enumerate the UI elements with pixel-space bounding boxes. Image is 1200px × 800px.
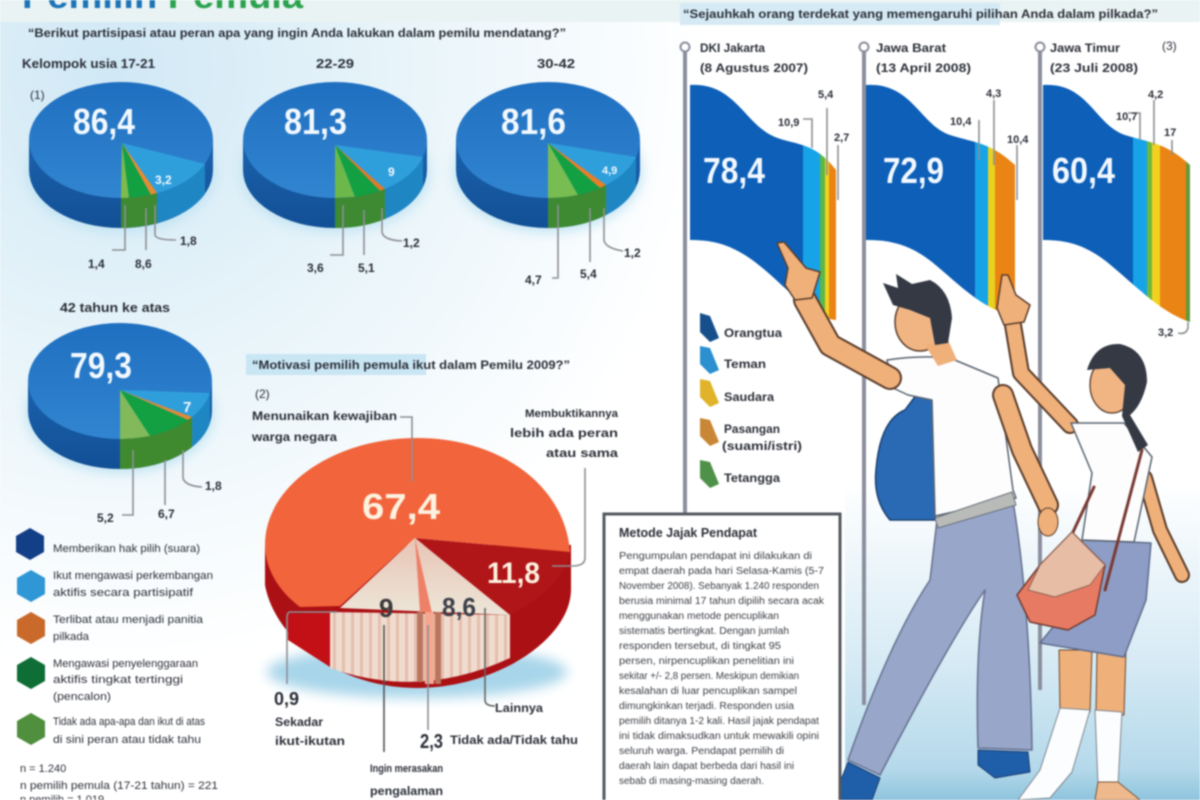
boy belt <box>935 492 1016 528</box>
callout: do not know <box>420 625 578 753</box>
pie chart: 42 and above: 7 <box>183 399 191 416</box>
legend item: no role: Tidak ada apa-apa dan ikut di atas <box>53 716 205 728</box>
pie chart: 17-21: 1,4 <box>88 257 105 271</box>
callout: experience: pengalaman <box>370 784 443 798</box>
flag chart: Jawa Timur: 10,7 <box>1116 111 1137 123</box>
pie chart: 30-42: 4,9 <box>602 165 617 177</box>
box body text: pemilih ditanya 1-2 kali. Hasil jajak pendapat <box>619 716 819 727</box>
box body text: berusia minimal 17 tahun dipilih secara acak <box>619 596 825 607</box>
callout: experience: Ingin merasakan <box>370 763 443 775</box>
callout: just following along: 0,9 <box>274 689 299 709</box>
pie chart: 42 and above: 79,3 <box>70 345 132 386</box>
boy lower arm <box>1003 395 1058 536</box>
callout: proving participation: atau sama <box>546 446 618 460</box>
callout: just following along: Sekadar <box>275 715 323 729</box>
box body text: sekitar +/- 2,8 persen. Meskipun demikian <box>619 671 799 682</box>
pie chart: 30-42: 4,7 <box>525 273 542 287</box>
heading highlight and question: “Sejauhkah orang terdekat yang memengaruhi pilihan Anda dalam pilkada?” <box>683 7 1158 21</box>
legend item: parents <box>700 313 782 342</box>
flag chart: Jawa Timur: 60,4 <box>1052 150 1115 191</box>
flag chart: Jawa Barat: 10,4 <box>1007 134 1029 146</box>
flag chart: DKI Jakarta: 78,4 <box>703 150 765 191</box>
callout: proving participation: Membuktikannya <box>525 408 619 420</box>
flag chart: Jawa Barat: (13 April 2008) <box>876 61 971 75</box>
callout: civic duty: warga negara <box>251 430 337 444</box>
flag chart: Jawa Timur: 4,2 <box>1148 89 1163 101</box>
pie chart: 30-42: 5,4 <box>580 267 597 281</box>
pie chart: 22-29 <box>241 82 429 275</box>
legend item: voting: Memberikan hak pilih (suara) <box>53 543 200 555</box>
flag chart: DKI Jakarta <box>688 41 849 325</box>
boy shoes <box>833 750 1030 800</box>
legend item: parents: Orangtua <box>724 326 782 340</box>
heading highlight and question <box>246 354 570 375</box>
3D pie chart: motivation: 9 <box>379 593 393 623</box>
legend item: neighbours <box>700 460 780 488</box>
boy backpack <box>876 363 941 520</box>
panel: influencers in regional elections <box>680 3 1191 705</box>
3D pie chart: motivation <box>265 438 571 698</box>
legend item: committee <box>17 612 204 644</box>
callout: other <box>485 608 543 715</box>
legend item: relatives <box>700 379 774 407</box>
box body text: dimungkinkan terjadi. Responden usia <box>619 701 794 712</box>
flag chart: Jawa Timur: 3,2 <box>1158 327 1173 339</box>
callout: experience <box>370 625 443 798</box>
3D pie chart: motivation: 11,8 <box>487 557 540 590</box>
pie chart: 22-29: 1,2 <box>403 236 420 250</box>
box body text: responden tersebut, di tingkat 95 <box>619 641 781 652</box>
flag chart: Jawa Barat: Jawa Barat <box>876 41 946 55</box>
girl hair <box>1087 344 1148 452</box>
legend item: spouse <box>700 418 802 453</box>
panel: age group pie charts <box>22 56 642 525</box>
legend item: monitoring: aktifis secara partisipatif <box>53 587 194 599</box>
legend item: friends <box>700 346 766 374</box>
box heading: Metode Jajak Pendapat <box>619 526 758 540</box>
box body text: November 2008). Sebanyak 1.240 responden <box>619 581 819 592</box>
pie chart: 17-21: 8,6 <box>135 257 152 271</box>
label: age 22-29: 22-29 <box>316 56 354 71</box>
label: age 42 and above: 42 tahun ke atas <box>60 300 170 315</box>
pie chart: 17-21: 86,4 <box>73 101 135 142</box>
legend item: committee: Terlibat atau menjadi panitia <box>53 614 204 626</box>
pie chart: 30-42: 81,6 <box>501 101 566 142</box>
boy raised arm outline and skin <box>777 242 890 378</box>
label: chart number: (3) <box>1162 39 1177 53</box>
girl lower arm <box>1145 478 1182 575</box>
girl head <box>1090 357 1134 413</box>
label: chart number: (2) <box>255 387 270 401</box>
panel: survey methodology box <box>604 514 840 800</box>
pie chart: 22-29: 3,6 <box>307 261 324 275</box>
flag chart: Jawa Barat: 10,4 <box>950 116 972 128</box>
legend item: high-level involvement: (pencalon) <box>53 691 111 703</box>
box body text: seluruh warga. Pendapat pemilih di <box>619 746 784 757</box>
illustration: girl student pointing <box>997 275 1182 800</box>
legend item: voting <box>16 528 200 560</box>
legend item: high-level involvement: aktifis tingkat tertinggi <box>53 674 183 686</box>
girl legs <box>1059 650 1126 715</box>
flag chart: DKI Jakarta: 2,7 <box>834 132 849 144</box>
subtitle: survey question one: “Berikut partisipasi atau peran apa yang ingin Anda lakukan dalam pemilu mendatang?” <box>28 26 566 40</box>
flag chart: Jawa Barat: 4,3 <box>986 88 1001 100</box>
pie chart: 30-42 <box>454 82 642 287</box>
legend: participation types <box>16 528 218 800</box>
boy trousers <box>848 495 1032 775</box>
flag chart: Jawa Timur <box>1043 41 1191 339</box>
flag chart: DKI Jakarta: (8 Agustus 2007) <box>700 61 808 75</box>
box body text: sebab di masing-masing daerah. <box>619 776 764 787</box>
girl shoulder bag <box>1017 532 1105 630</box>
legend item: spouse: (suami/istri) <box>722 439 802 453</box>
bag strap <box>1060 450 1142 590</box>
boy hair <box>883 274 952 345</box>
legend item: friends: Teman <box>724 357 766 371</box>
legend item: no role <box>17 713 205 746</box>
legend item: monitoring: Ikut mengawasi perkembangan <box>53 570 213 582</box>
pie chart: 42 and above <box>26 323 222 525</box>
legend item: committee: pilkada <box>53 631 90 643</box>
flag chart: Jawa Timur: Jawa Timur <box>1050 41 1120 55</box>
pie chart: 30-42: 1,2 <box>624 246 641 260</box>
pie chart: 17-21: 3,2 <box>155 173 172 187</box>
flag chart: DKI Jakarta: 10,9 <box>778 117 799 129</box>
callout: proving participation <box>510 408 619 566</box>
pie chart: 42 and above: 6,7 <box>158 507 175 521</box>
panel: first-time voter motivation <box>246 354 619 798</box>
callout: proving participation: lebih ada peran <box>510 426 618 440</box>
label: age 30-42: 30-42 <box>537 56 575 71</box>
girl feet <box>1095 782 1140 800</box>
legend: influencer types <box>700 313 802 488</box>
label: age 17-21: Kelompok usia 17-21 <box>22 56 155 71</box>
legend item: high-level involvement <box>17 657 198 703</box>
callout: civic duty: Menunaikan kewajiban <box>252 409 397 423</box>
legend item: relatives: Saudara <box>724 390 774 404</box>
girl skirt <box>1040 540 1151 657</box>
boy neck <box>925 340 957 366</box>
callout: do not know: 2,3 <box>420 731 443 753</box>
box body text: daerah lain dapat berbeda dari hasil ini <box>619 761 794 772</box>
girl raised arm <box>997 275 1070 425</box>
legend item: neighbours: Tetangga <box>724 471 780 485</box>
3D pie chart: motivation: 67,4 <box>362 486 440 527</box>
box body text: menggunakan metode pencuplikan <box>619 611 779 622</box>
heading highlight and question <box>680 3 1158 25</box>
boy head <box>895 293 945 351</box>
legend item: monitoring <box>17 570 213 602</box>
girl socks <box>1018 708 1122 800</box>
callout: civic duty <box>251 409 412 482</box>
box body text: Pengumpulan pendapat ini dilakukan di <box>619 551 812 562</box>
callout: other: Lainnya <box>495 701 543 715</box>
heading highlight and question: “Motivasi pemilih pemula ikut dalam Pemilu 2009?” <box>252 358 570 372</box>
pie chart: 22-29: 9 <box>388 165 395 179</box>
flag chart: DKI Jakarta: 5,4 <box>818 89 834 101</box>
pie chart: 17-21: 1,8 <box>180 234 197 248</box>
sample note: n = 1.240 <box>20 763 66 775</box>
box body text: persen, nirpencuplikan penelitian ini <box>619 656 794 667</box>
pie chart: 42 and above: 1,8 <box>205 479 222 493</box>
box body text: sistematis bertingkat. Dengan jumlah <box>619 626 789 637</box>
box body text: empat daerah pada hari Selasa-Kamis (5-7 <box>619 566 824 577</box>
callout: just following along <box>274 612 345 748</box>
legend item: high-level involvement: Mengawasi penyelenggaraan <box>53 658 198 670</box>
box body text: kesalahan di luar pencuplikan sampel <box>619 686 797 697</box>
flag chart: Jawa Barat: 72,9 <box>883 150 944 191</box>
flag chart: Jawa Timur: 17 <box>1164 127 1176 139</box>
legend item: no role: di sini peran atau tidak tahu <box>53 734 201 746</box>
box body text: ini tidak dimaksudkan untuk mewakili opini <box>619 731 819 742</box>
callout: do not know: Tidak ada/Tidak tahu <box>450 733 578 747</box>
callout: just following along: ikut-ikutan <box>275 734 345 748</box>
sample note: n pemilih pemula (17-21 tahun) = 221 <box>20 780 218 792</box>
illustration: boy student pointing <box>777 242 1058 800</box>
boy shirt <box>887 357 1016 516</box>
pie chart: 22-29: 5,1 <box>358 261 375 275</box>
flagpoles <box>680 42 1044 705</box>
legend item: spouse: Pasangan <box>724 422 780 436</box>
girl shirt <box>1071 423 1152 542</box>
pie chart: 22-29: 81,3 <box>284 101 347 142</box>
flag chart: DKI Jakarta: DKI Jakarta <box>700 41 765 55</box>
flag chart: Jawa Barat <box>866 41 1029 325</box>
label: chart number: (1) <box>30 88 45 102</box>
flag chart: Jawa Timur: (23 Juli 2008) <box>1050 61 1138 75</box>
3D pie chart: motivation: 8,6 <box>442 592 476 622</box>
pie chart: 42 and above: 5,2 <box>97 511 114 525</box>
pie chart: 17-21 <box>27 82 215 271</box>
